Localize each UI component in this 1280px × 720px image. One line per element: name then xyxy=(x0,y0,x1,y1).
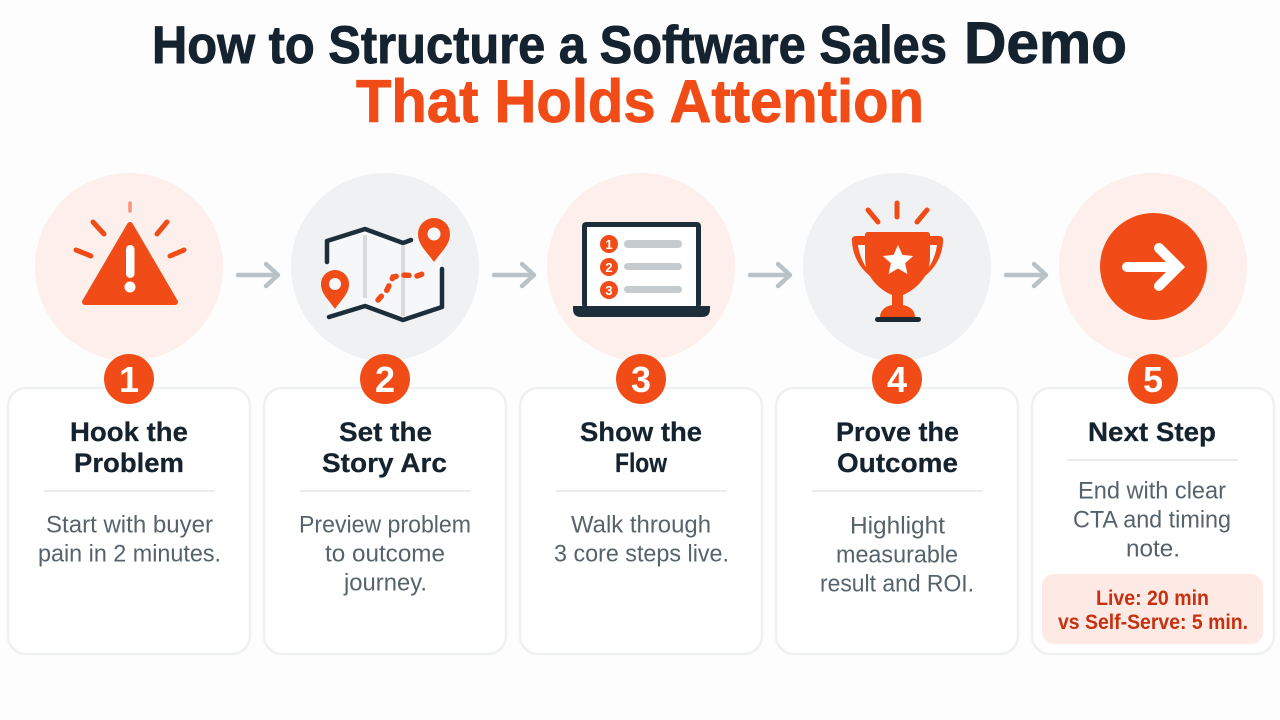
card: prove the outcome: Highlight xyxy=(850,512,945,540)
badge 2 xyxy=(360,354,410,404)
card: prove the outcome: Prove the xyxy=(836,417,959,447)
step 1: hook the problem xyxy=(8,173,250,654)
card: prove the outcome xyxy=(776,388,1018,654)
step 4: prove the outcome xyxy=(776,173,1018,654)
arrow 1 xyxy=(238,264,278,286)
card: hook the problem: Problem xyxy=(74,448,184,478)
icon: trophy xyxy=(803,173,991,361)
title: How to Structure a Software Sales xyxy=(152,16,947,75)
card: show the flow xyxy=(520,388,762,654)
arrow 3 xyxy=(750,264,790,286)
callout: timing note: vs Self-Serve: 5 min. xyxy=(1058,611,1248,634)
icon: map with pins xyxy=(291,173,479,361)
callout: timing note: Live: 20 min xyxy=(1096,587,1209,610)
icon: laptop with checklist: 1 xyxy=(605,237,613,252)
step 2: set the story arc xyxy=(264,173,506,654)
card: set the story arc: Preview problem xyxy=(299,512,471,538)
card: show the flow: 3 core steps live. xyxy=(554,540,729,568)
step 3: show the flow xyxy=(520,173,762,654)
arrow 2 xyxy=(494,264,534,286)
card: next step: Next Step xyxy=(1088,417,1216,447)
card: prove the outcome: Outcome xyxy=(837,448,958,478)
icon: laptop with checklist xyxy=(547,173,735,361)
step 5: next step xyxy=(1032,173,1274,654)
card: hook the problem: Hook the xyxy=(70,417,188,447)
icon: arrow button xyxy=(1059,173,1247,361)
icon: alert triangle xyxy=(35,173,223,361)
card: hook the problem xyxy=(8,388,250,654)
badge 2: 2 xyxy=(375,359,395,400)
card: show the flow: Walk through xyxy=(571,512,711,538)
card: set the story arc: journey. xyxy=(343,570,427,596)
badge 1: 1 xyxy=(119,359,139,400)
arrow 4 xyxy=(1006,264,1046,286)
card: set the story arc: Set the xyxy=(339,417,432,447)
title: Demo xyxy=(964,11,1127,76)
badge 3: 3 xyxy=(631,359,651,400)
card: set the story arc: Story Arc xyxy=(322,448,447,478)
card: show the flow: Show the xyxy=(580,417,702,447)
card: hook the problem: Start with buyer xyxy=(46,512,213,538)
card: next step: End with clear xyxy=(1078,478,1226,504)
badge 4: 4 xyxy=(887,359,907,400)
badge 3 xyxy=(616,354,666,404)
card: set the story arc xyxy=(264,388,506,654)
title xyxy=(152,11,1127,135)
title: That Holds Attention xyxy=(356,68,924,135)
badge 5: 5 xyxy=(1143,359,1163,400)
card: prove the outcome: measurable xyxy=(836,542,958,568)
card: hook the problem: pain in 2 minutes. xyxy=(38,540,221,568)
badge 5 xyxy=(1128,354,1178,404)
card: next step: note. xyxy=(1126,536,1180,562)
card: next step xyxy=(1032,388,1274,654)
card: show the flow: Flow xyxy=(615,448,668,478)
icon: laptop with checklist: 2 xyxy=(605,260,613,275)
icon: laptop with checklist: 3 xyxy=(605,283,613,298)
callout: timing note xyxy=(1042,574,1263,644)
card: next step: CTA and timing xyxy=(1073,506,1231,534)
badge 4 xyxy=(872,354,922,404)
badge 1 xyxy=(104,354,154,404)
card: prove the outcome: result and ROI. xyxy=(820,570,974,598)
card: set the story arc: to outcome xyxy=(325,540,445,568)
